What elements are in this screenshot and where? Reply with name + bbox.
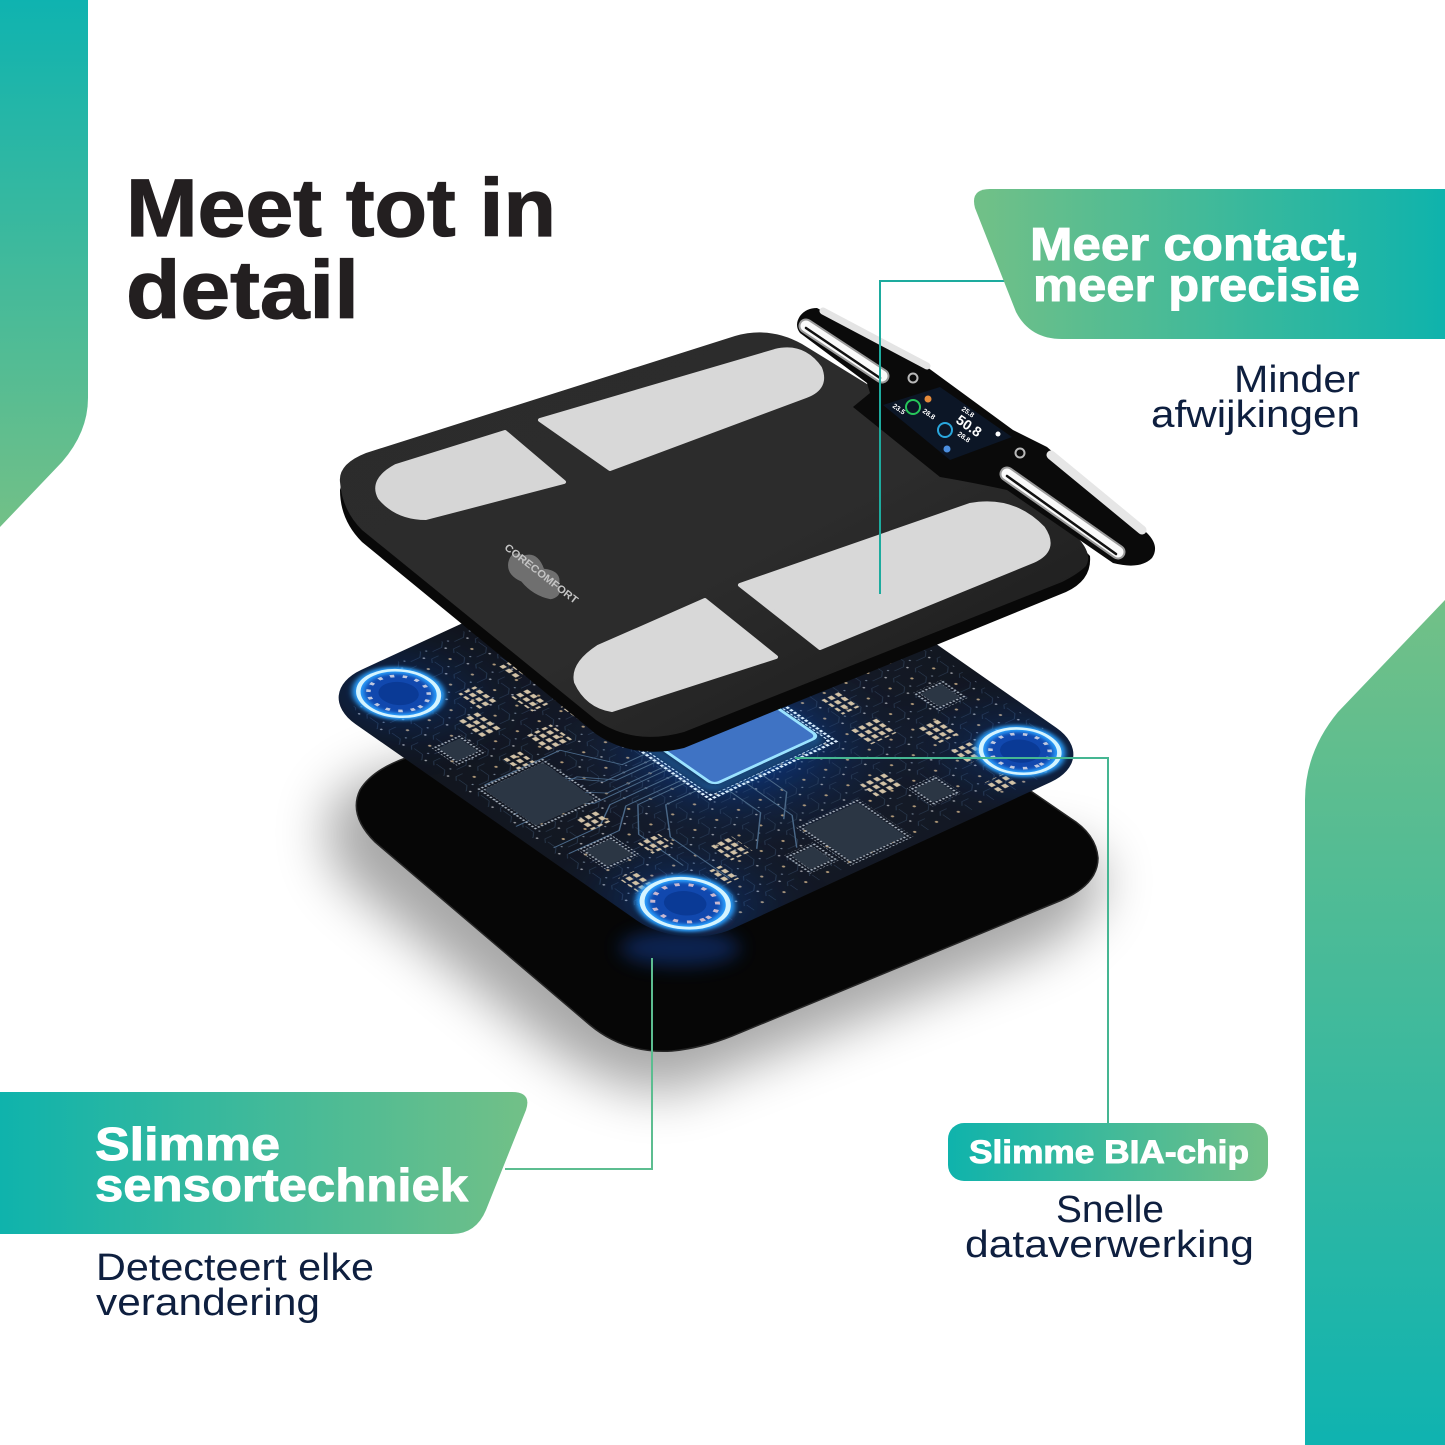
- callout heading: meer precisie: [1033, 259, 1360, 311]
- callout: meer contact: [974, 189, 1445, 339]
- callout leader: chip: [795, 758, 1108, 1123]
- handle body: [797, 308, 1155, 566]
- callout text: snelle dataverwerking: [965, 1189, 1254, 1266]
- chrome grip upper outer: [823, 311, 927, 366]
- central trace bundle: [468, 704, 839, 917]
- callout text: detecteert elke verandering: Detecteert elke: [96, 1247, 374, 1289]
- callout text: detecteert elke verandering: verandering: [96, 1282, 320, 1324]
- callout heading: Slimme: [95, 1118, 280, 1170]
- display screen: [883, 387, 1012, 460]
- chrome grip upper inner: [806, 326, 882, 378]
- display screen: 25.8: [960, 406, 975, 420]
- callout heading: Meer contact,: [1030, 218, 1359, 270]
- callout text: snelle dataverwerking: dataverwerking: [965, 1224, 1254, 1266]
- display screen: 28.8: [956, 431, 971, 445]
- product illustration: exploded scale: [311, 308, 1155, 1091]
- callout banner: [0, 1092, 527, 1234]
- pill label: [948, 1123, 1268, 1181]
- circuit board layer: [338, 624, 1074, 936]
- callout heading: [1030, 218, 1360, 311]
- CoreComfort logo: [494, 538, 583, 617]
- blue reflection on base: [620, 930, 740, 966]
- foot pad right long: [740, 503, 1049, 648]
- callout heading: sensortechniek: [95, 1159, 468, 1211]
- sensor ring bottom: [622, 867, 748, 939]
- small chips: [431, 579, 1057, 929]
- left gradient corner panel: [0, 0, 88, 527]
- callout heading: [95, 1118, 468, 1211]
- CoreComfort logo: CORECOMFORT: [502, 542, 581, 607]
- foot pad top left: [377, 432, 564, 518]
- callout text: minder afwijkingen: [1151, 359, 1360, 436]
- scale top plate: [340, 332, 1088, 737]
- blue glow at ring corners: [338, 640, 1074, 936]
- callout leader: sensors: [505, 958, 652, 1169]
- title: [126, 163, 556, 336]
- display screen: 23.5: [891, 403, 906, 417]
- shadow under base: [327, 764, 1102, 1091]
- callout text: snelle dataverwerking: Snelle: [1056, 1189, 1164, 1231]
- right gradient side panel: [1305, 600, 1445, 1445]
- callout: slimme BIA-chip: [948, 1123, 1268, 1181]
- chrome grip lower inner: [1007, 474, 1118, 554]
- board via and trace texture: [327, 509, 1085, 943]
- handle button top: [908, 374, 918, 382]
- central BIA chip: [626, 683, 840, 802]
- foot pad bottom small: [575, 600, 776, 710]
- component clusters: [388, 565, 1027, 933]
- callout banner: [974, 189, 1445, 339]
- callout text: minder afwijkingen: Minder: [1234, 359, 1360, 401]
- board outline: [311, 500, 1101, 952]
- title: detail: [126, 245, 359, 336]
- callout leader: contact: [880, 281, 1005, 594]
- callout: slimme sensortechniek: [0, 1092, 527, 1234]
- display screen: 28.8: [921, 408, 936, 422]
- sensor ring top left: [339, 660, 458, 727]
- handle button bottom: [1016, 448, 1024, 458]
- title: Meet tot in: [126, 163, 556, 254]
- sensor ring right: [962, 718, 1078, 784]
- callout text: detecteert elke verandering: [96, 1247, 374, 1324]
- chrome grip lower outer: [1051, 455, 1142, 530]
- scale base plate: [356, 690, 1098, 1051]
- large chip left: [476, 758, 603, 830]
- pill heading: Slimme BIA-chip: [969, 1134, 1249, 1170]
- display screen: 50.8: [953, 411, 985, 440]
- scale plate underside thickness: [340, 470, 1090, 752]
- foot pad top long: [540, 349, 822, 469]
- callout text: minder afwijkingen: afwijkingen: [1151, 394, 1360, 436]
- large chip right: [795, 798, 913, 866]
